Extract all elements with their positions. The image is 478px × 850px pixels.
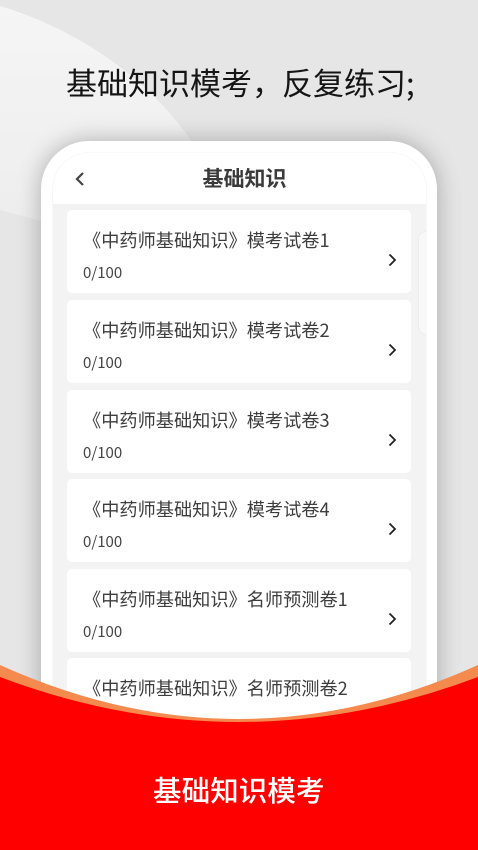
list item 6 — [67, 658, 411, 741]
item 5 score: 0/100 — [83, 621, 122, 642]
icon: chevron — [388, 254, 396, 266]
title: 基础知识模考， — [66, 59, 283, 104]
red bottom banner with orange curved edge — [0, 665, 478, 850]
icon: chevron — [388, 522, 396, 536]
icon: chevron — [388, 612, 396, 626]
banner caption: 基础知识模考 — [153, 769, 325, 810]
phone screen — [53, 153, 426, 773]
icon: back arrow — [76, 172, 84, 186]
item 4 score: 0/100 — [83, 531, 122, 552]
list item 3 — [67, 390, 411, 473]
item 3 score: 0/100 — [83, 442, 122, 463]
screen heading: 基础知识 — [202, 163, 286, 193]
list item 1 — [67, 210, 411, 293]
list item 2 — [67, 300, 411, 383]
title — [66, 59, 415, 104]
item 4 name: 《中药师基础知识》模考试卷4 — [83, 496, 330, 522]
item 2 name: 《中药师基础知识》模考试卷2 — [83, 316, 330, 342]
item 5 name: 《中药师基础知识》名师预测卷1 — [83, 586, 348, 612]
item 1 name: 《中药师基础知识》模考试卷1 — [83, 226, 330, 252]
list item 5 — [67, 569, 411, 652]
navigation bar — [53, 153, 426, 204]
item 2 score: 0/100 — [83, 352, 122, 373]
side handle — [418, 231, 426, 335]
icon: chevron — [388, 434, 396, 446]
list item 4 — [67, 479, 411, 562]
icon: chevron — [388, 344, 396, 356]
phone mockup — [41, 141, 437, 781]
title: 反复练习; — [282, 59, 415, 104]
item 3 name: 《中药师基础知识》模考试卷3 — [83, 406, 330, 432]
item 1 score: 0/100 — [83, 262, 122, 283]
item 6 name: 《中药师基础知识》名师预测卷2 — [83, 674, 348, 700]
